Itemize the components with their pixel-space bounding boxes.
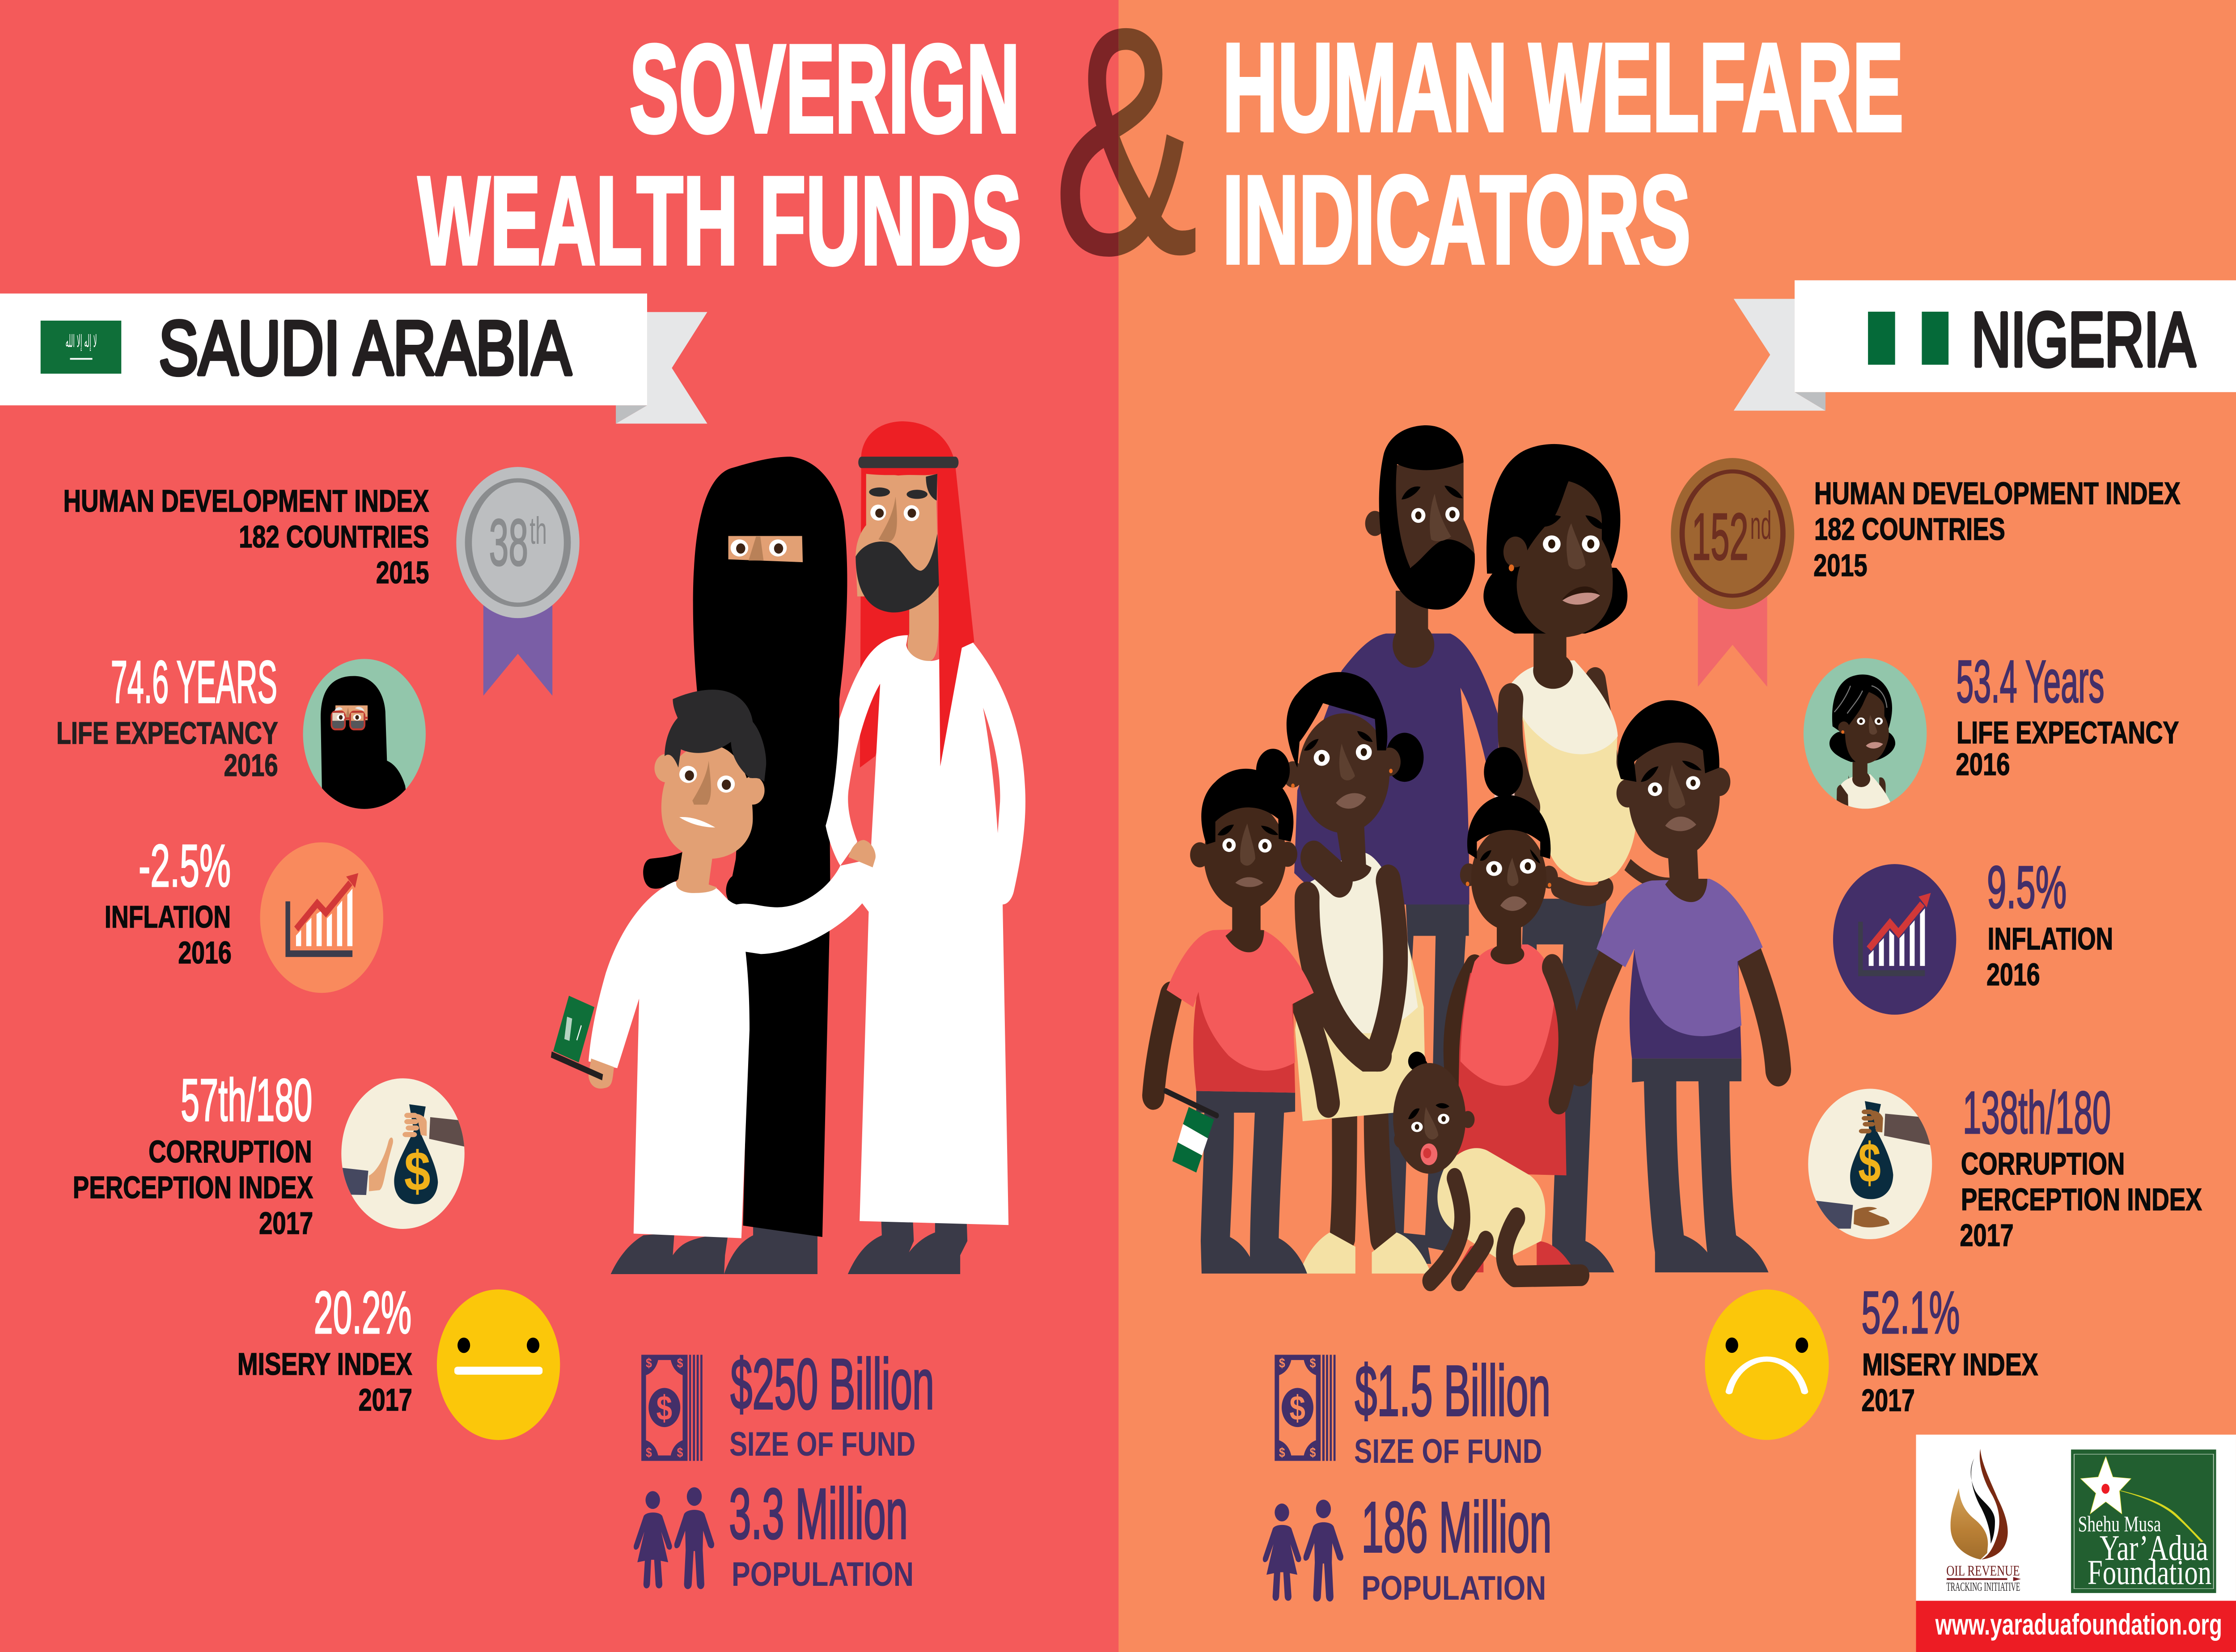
- stat: Nigeria corruption perception index: 2017: [1960, 1218, 2014, 1253]
- stat: Nigeria inflation: 9.5%: [1987, 853, 2067, 920]
- stat: Nigeria size of fund: $1.5 Billion: [1355, 1351, 1550, 1431]
- stat: Nigeria inflation: 2016: [1986, 957, 2040, 992]
- baby: [1393, 1052, 1581, 1281]
- mother: [643, 457, 847, 1237]
- stat: Nigeria corruption perception index: [1808, 1079, 2202, 1253]
- icon: refused bribe money bag: [338, 1078, 470, 1229]
- stat: Nigeria corruption perception index: 138th/180: [1963, 1079, 2111, 1146]
- text: Shehu Musa Yar'Adua Foundation: Shehu Musa: [2078, 1511, 2161, 1536]
- stat: Saudi size of fund: [641, 1344, 934, 1463]
- text: oil revenue tracking initiative: TRACKING INITIATIVE: [1946, 1580, 2020, 1594]
- icon: accepted bribe money bag: $: [1858, 1132, 1881, 1194]
- stat: Saudi size of fund: $: [646, 1445, 652, 1460]
- stat: Nigeria size of fund: $: [1310, 1355, 1316, 1371]
- stat: Saudi corruption perception index: [73, 1066, 470, 1241]
- title: right part: INDICATORS: [1223, 150, 1690, 290]
- stat: Saudi population: [634, 1474, 914, 1593]
- text: oil revenue tracking initiative: OIL REVENUE: [1946, 1562, 2020, 1579]
- title: ampersand: [1060, 28, 1196, 257]
- feet: [611, 1218, 967, 1274]
- icon: woman and man: [1263, 1500, 1343, 1601]
- stat: Saudi population: POPULATION: [732, 1555, 914, 1593]
- background: Nigeria side: [1118, 0, 2236, 1652]
- banner: Nigeria: NIGERIA: [1972, 297, 2195, 382]
- stat: Nigeria inflation: [1833, 853, 2113, 1015]
- stat: Nigeria inflation: INFLATION: [1988, 921, 2113, 956]
- stat: Nigeria size of fund: $: [1279, 1355, 1285, 1371]
- stat: Saudi human development index: HUMAN DEVELOPMENT INDEX: [64, 483, 429, 518]
- icon: sad face: [1705, 1289, 1829, 1440]
- stat: Nigeria size of fund: $: [1289, 1389, 1305, 1428]
- text: oil revenue tracking initiative: [1946, 1562, 2020, 1594]
- stat: Nigeria population: 186 Million: [1361, 1487, 1552, 1567]
- stat: Saudi misery index: 20.2%: [314, 1279, 411, 1346]
- icon: accepted bribe money bag: [1808, 1089, 1935, 1239]
- stat: Nigeria human development index: 182 COUNTRIES: [1814, 512, 2005, 546]
- stat: Saudi size of fund: $: [677, 1355, 683, 1371]
- text: Shehu Musa Yar'Adua Foundation: Foundation: [2088, 1554, 2211, 1592]
- stat: Saudi size of fund: $: [677, 1445, 683, 1460]
- stat: Saudi human development index: th: [529, 510, 547, 552]
- stat: Nigeria misery index: 52.1%: [1861, 1279, 1960, 1346]
- icon: banknote stack: [641, 1355, 703, 1461]
- stat: Saudi size of fund: $250 Billion: [730, 1344, 934, 1424]
- stat: Saudi size of fund: $: [646, 1355, 652, 1371]
- father: [1294, 425, 1499, 1264]
- stat: Saudi human development index: 2015: [376, 555, 429, 590]
- stat: Saudi population: 3.3 Million: [729, 1474, 908, 1554]
- icon: mother portrait: [1804, 658, 1927, 812]
- stat: Saudi life expectancy: 2016: [224, 748, 278, 783]
- text: Shehu Musa Yar'Adua Foundation: [2078, 1511, 2211, 1592]
- stat: Nigeria human development index: 2015: [1813, 548, 1868, 583]
- stat: Nigeria human development index: [1671, 458, 2181, 687]
- text: Shehu Musa Yar'Adua Foundation: Yar’Adua: [2100, 1528, 2208, 1568]
- stat: Nigeria life expectancy: 2016: [1956, 747, 2010, 782]
- stat: Nigeria human development index: nd: [1750, 504, 1771, 548]
- stat: Saudi misery index: MISERY INDEX: [237, 1347, 412, 1381]
- stat: Nigeria misery index: MISERY INDEX: [1862, 1347, 2038, 1382]
- icon: veiled elder portrait: [303, 659, 426, 820]
- stat: Saudi corruption perception index: CORRUPTION: [148, 1134, 312, 1169]
- stat: Nigeria human development index: 152: [1692, 500, 1749, 574]
- son: [1580, 700, 1778, 1272]
- illustration: Nigerian family: [1153, 425, 1778, 1281]
- stat: Nigeria misery index: [1705, 1279, 2038, 1440]
- stat: Nigeria life expectancy: [1804, 648, 2179, 812]
- icon: banknote stack: [1275, 1355, 1335, 1461]
- stat: Nigeria human development index: HUMAN DEVELOPMENT INDEX: [1814, 476, 2181, 511]
- little girl: [1453, 747, 1575, 1272]
- stat: Nigeria size of fund: $: [1279, 1445, 1285, 1460]
- stat: Saudi human development index: [64, 467, 580, 696]
- illustration: Saudi family: [551, 421, 1025, 1274]
- son: [551, 690, 876, 1238]
- banner: Saudi Arabia: [0, 293, 707, 424]
- stat: Saudi size of fund: $: [656, 1389, 672, 1428]
- title: right part: [1223, 17, 1904, 290]
- logo panel shapes: [1916, 1435, 2236, 1652]
- stat: Nigeria population: POPULATION: [1361, 1569, 1546, 1607]
- stat: Nigeria population: [1263, 1487, 1552, 1607]
- stat: Saudi human development index: 38: [489, 505, 528, 580]
- stat: Saudi human development index: 182 COUNTRIES: [239, 519, 429, 554]
- stat: Saudi life expectancy: 74.6 YEARS: [111, 648, 277, 715]
- icon: refused bribe money bag: $: [404, 1140, 431, 1203]
- stat: Saudi corruption perception index: PERCEPTION INDEX: [73, 1170, 313, 1205]
- title: left part: WEALTH FUNDS: [418, 151, 1021, 291]
- stat: Saudi size of fund: SIZE OF FUND: [729, 1425, 915, 1463]
- stat: Saudi life expectancy: LIFE EXPECTANCY: [56, 716, 278, 750]
- stat: Nigeria corruption perception index: PERCEPTION INDEX: [1961, 1182, 2202, 1217]
- stat: Nigeria size of fund: $: [1310, 1445, 1316, 1460]
- stat: Saudi misery index: [237, 1279, 560, 1440]
- stat: Saudi corruption perception index: 2017: [259, 1206, 313, 1241]
- tall daughter: [1283, 672, 1431, 1274]
- banner: Saudi Arabia: SAUDI ARABIA: [159, 306, 572, 391]
- mother: [1483, 444, 1637, 1272]
- icon: woman and man: [634, 1487, 714, 1589]
- stat: Nigeria size of fund: [1275, 1351, 1550, 1470]
- banner: Saudi Arabia: لا إله إلا الله: [65, 332, 97, 352]
- stat: Saudi inflation: 2016: [178, 935, 232, 970]
- title: left part: [418, 19, 1021, 291]
- stat: Nigeria life expectancy: LIFE EXPECTANCY: [1956, 715, 2179, 750]
- icon: rising chart on purple circle: [1833, 864, 1956, 1015]
- stat: Nigeria corruption perception index: CORRUPTION: [1961, 1146, 2125, 1181]
- stat: Saudi inflation: [105, 832, 383, 993]
- stat: Nigeria life expectancy: 53.4 Years: [1956, 648, 2105, 715]
- father: [826, 421, 1025, 1225]
- stat: Nigeria size of fund: SIZE OF FUND: [1354, 1432, 1542, 1470]
- stat: Saudi inflation: INFLATION: [105, 899, 231, 934]
- banner: Nigeria: [1734, 280, 2236, 411]
- title: left part: SOVERIGN: [630, 19, 1020, 159]
- icon: neutral face: [437, 1289, 560, 1440]
- footer: logos and website: [1916, 1435, 2236, 1652]
- left girl with flag: [1153, 749, 1328, 1274]
- stat: Saudi misery index: 2017: [359, 1382, 412, 1417]
- title: right part: HUMAN WELFARE: [1223, 17, 1904, 157]
- stat: Saudi life expectancy: [58, 659, 426, 809]
- stat: Saudi inflation: -2.5%: [139, 832, 231, 899]
- background: Saudi side: [0, 0, 1118, 1652]
- icon: rising chart on orange circle: [260, 842, 383, 993]
- stat: Nigeria misery index: 2017: [1861, 1383, 1915, 1418]
- stat: Saudi corruption perception index: 57th/180: [181, 1066, 313, 1133]
